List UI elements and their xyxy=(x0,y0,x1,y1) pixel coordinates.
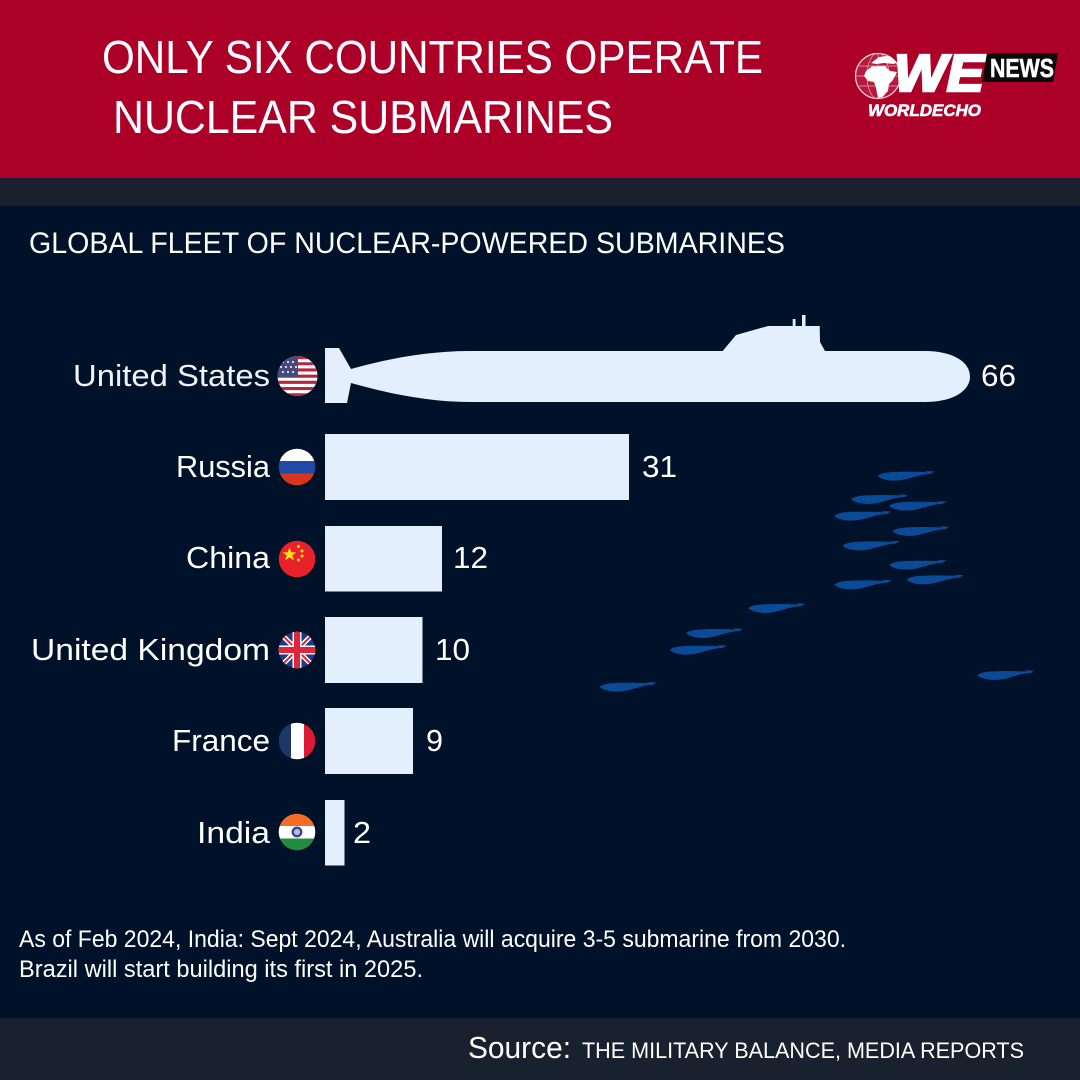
label: Russia: Russia xyxy=(176,449,271,484)
icon: Russia flag xyxy=(278,448,316,486)
label: United Kingdom: United Kingdom xyxy=(31,632,270,667)
value: 2: 2 xyxy=(353,815,371,850)
source line: THE MILITARY BALANCE, MEDIA REPORTS xyxy=(582,1038,1024,1063)
title: NUCLEAR SUBMARINES xyxy=(113,91,613,143)
source line xyxy=(468,1030,1024,1065)
title xyxy=(102,31,763,143)
label: United States: United States xyxy=(73,358,270,393)
row: Russia xyxy=(176,434,677,500)
value: 12: 12 xyxy=(453,540,488,575)
icon: France flag xyxy=(278,722,317,760)
row: United States xyxy=(73,315,1016,403)
icon: globe xyxy=(855,53,903,99)
logo badge NEWS: NEWS xyxy=(990,53,1054,83)
row: United Kingdom xyxy=(31,617,470,683)
footnote: As of Feb 2024, India: Sept 2024, Australia will acquire 3-5 submarine from 2030. xyxy=(19,926,846,953)
bar: India xyxy=(325,800,344,866)
footer bar xyxy=(0,1018,1080,1080)
logo: WE News Worldecho xyxy=(854,52,1058,116)
logo letters WE: WE xyxy=(894,45,985,103)
bar: Russia xyxy=(325,434,629,500)
label: France: France xyxy=(172,723,270,758)
bar chart xyxy=(31,315,1016,866)
row: France xyxy=(172,708,443,774)
chart heading: GLOBAL FLEET OF NUCLEAR-POWERED SUBMARINES xyxy=(29,227,785,260)
icon: fish school xyxy=(600,471,1034,692)
title: ONLY SIX COUNTRIES OPERATE xyxy=(102,31,763,83)
row: India xyxy=(197,800,371,866)
bar: France xyxy=(325,708,413,774)
icon: India flag xyxy=(278,813,316,852)
value: 31: 31 xyxy=(642,449,677,484)
value: 10: 10 xyxy=(435,632,470,667)
header banner xyxy=(0,0,1080,206)
label: India: India xyxy=(197,815,271,850)
logo wordmark WORLDECHO: WORLDECHO xyxy=(868,101,981,120)
row: China xyxy=(186,526,488,592)
bar: United Kingdom xyxy=(325,617,422,683)
icon: UK flag xyxy=(278,631,316,669)
icon: US flag xyxy=(277,356,318,397)
value: 66: 66 xyxy=(981,358,1016,393)
source line: Source: xyxy=(468,1030,571,1065)
main background panel xyxy=(0,206,1080,1018)
value: 9: 9 xyxy=(426,723,443,758)
bar: China xyxy=(325,526,442,592)
footnote: Brazil will start building its first in 2025. xyxy=(19,956,423,983)
icon: China flag xyxy=(278,540,316,578)
label: China: China xyxy=(186,540,271,575)
submarine bar xyxy=(325,315,970,403)
footnote xyxy=(19,926,846,983)
